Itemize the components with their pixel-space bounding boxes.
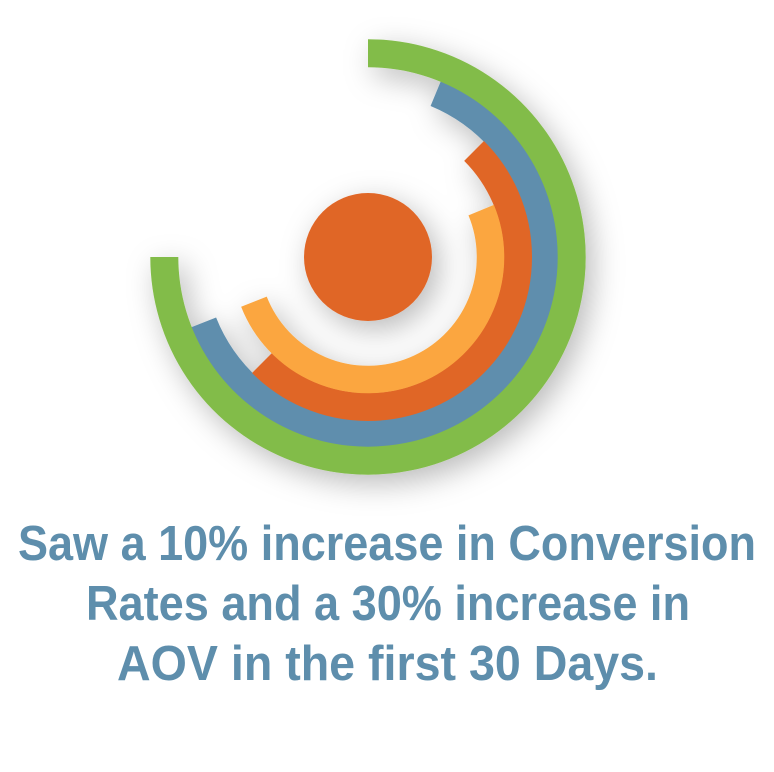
arc: light orange ring — [254, 210, 491, 380]
arc: green outer ring — [164, 53, 572, 461]
radial arc chart — [164, 53, 572, 461]
arc: dark orange ring — [262, 151, 518, 407]
arc: blue ring — [204, 93, 545, 434]
caption text: AOV in the first 30 Days. — [117, 636, 658, 691]
caption text — [18, 516, 756, 691]
caption text: Rates and a 30% increase in — [86, 576, 690, 631]
center circle — [304, 193, 432, 321]
